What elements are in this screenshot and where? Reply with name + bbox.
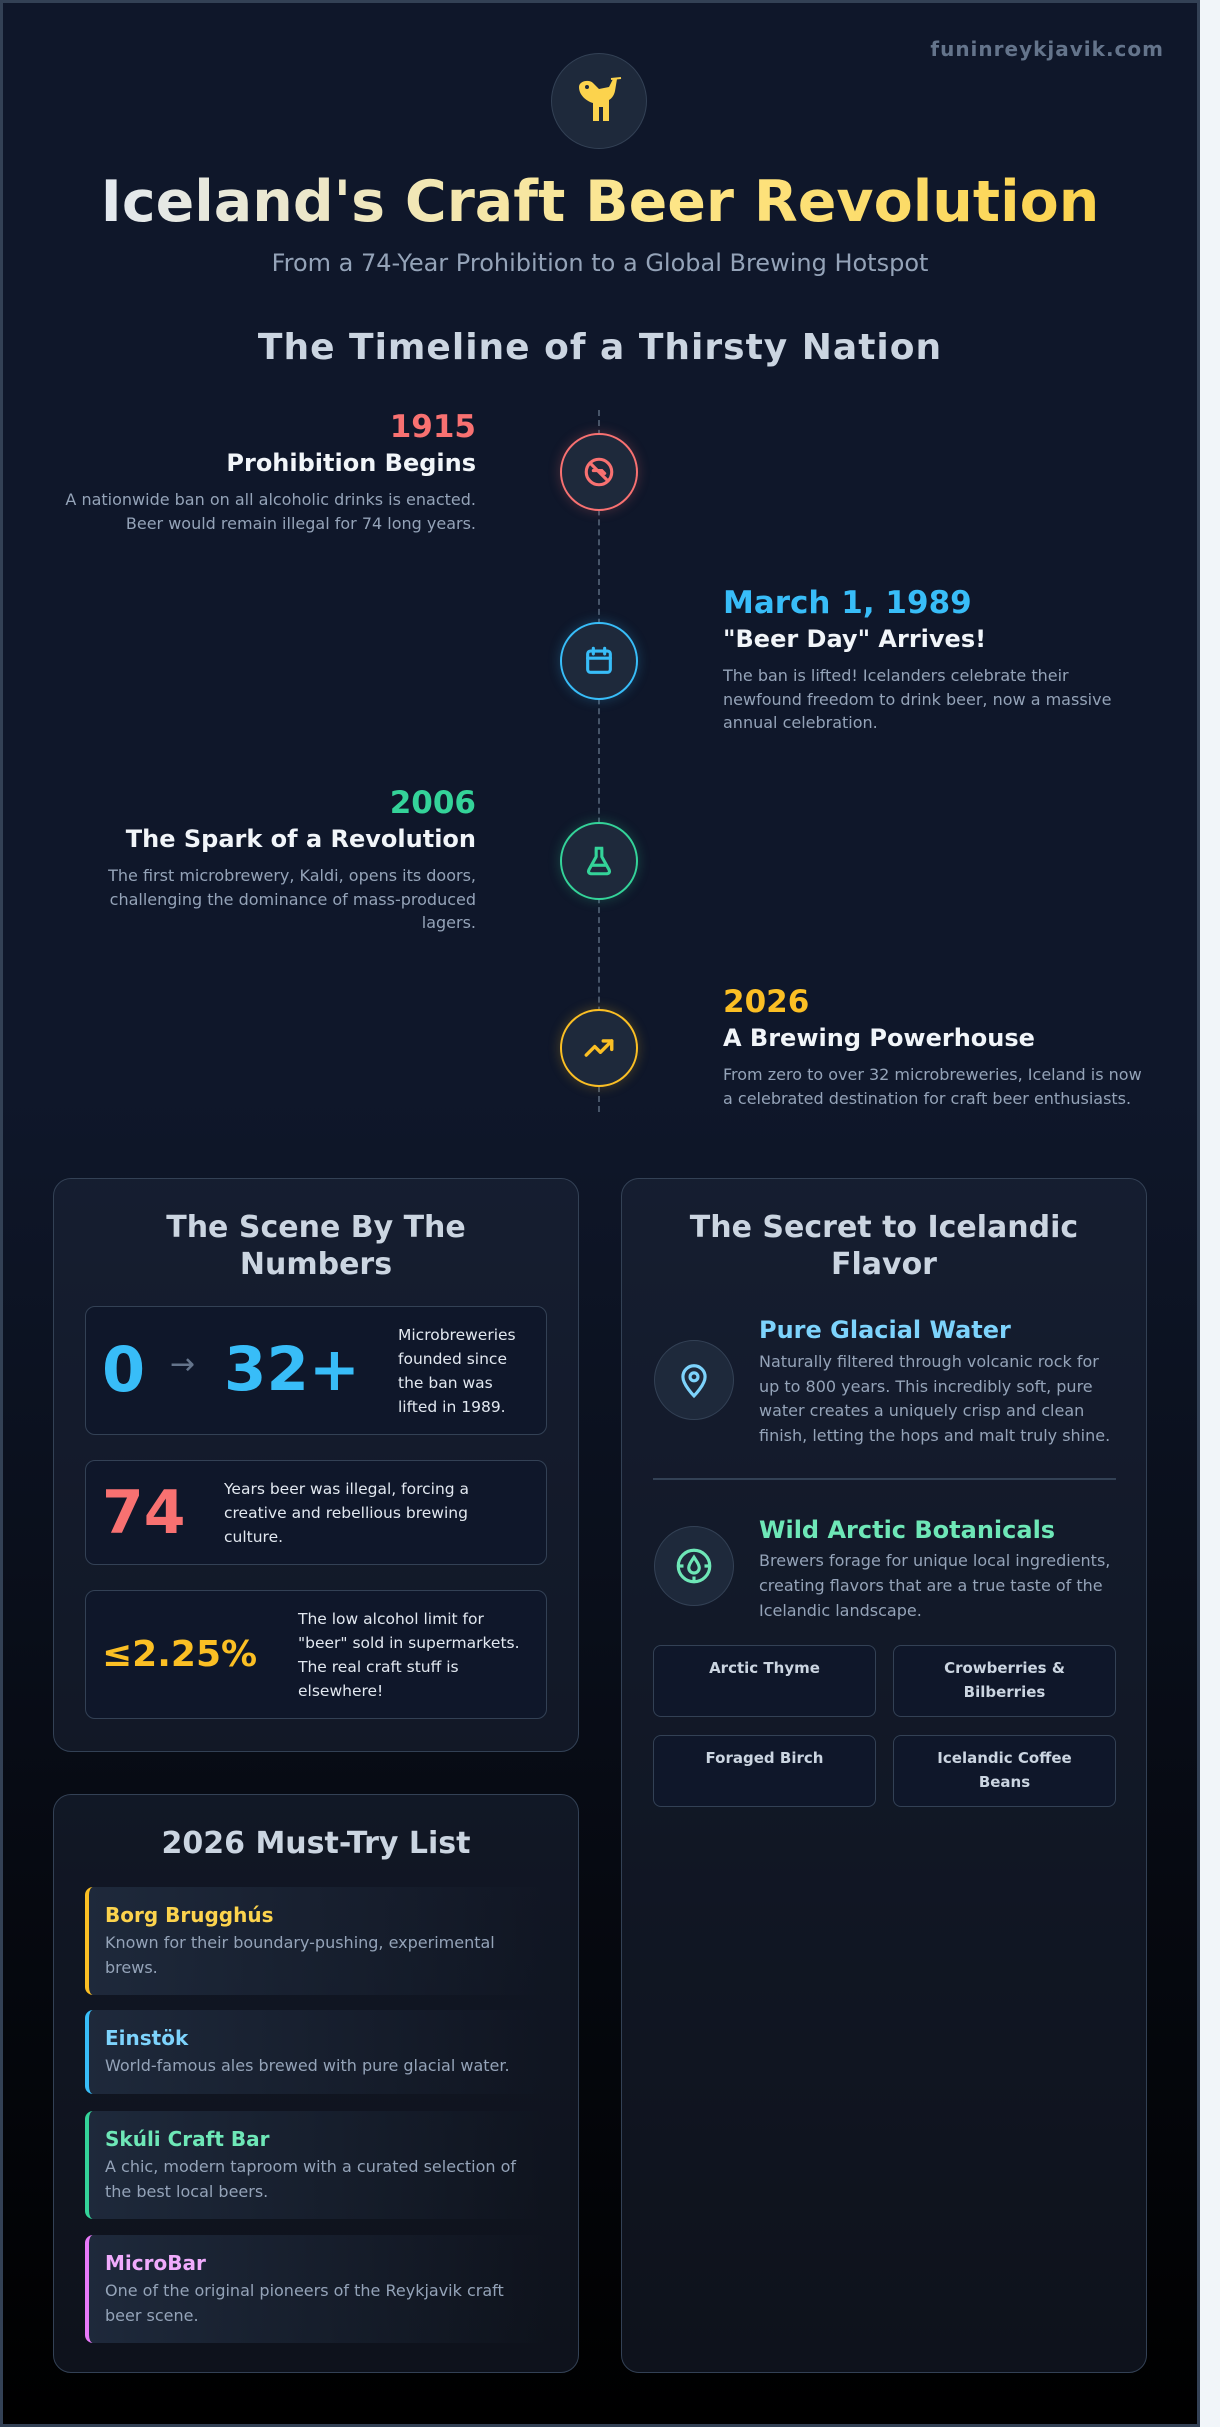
panel heading: The Scene By The — [166, 1210, 466, 1245]
item: skuli: Skúli Craft Bar — [105, 2127, 269, 2151]
feature: glacial water: Pure Glacial Water — [759, 1316, 1011, 1344]
stat: 2.25%: ≤2.25% — [102, 1634, 257, 1675]
timeline item: 2026: 2026 — [723, 984, 809, 1020]
tag: coffee beans — [893, 1735, 1116, 1807]
item: einstok — [85, 2010, 547, 2094]
panel: scene by the numbers — [53, 1178, 579, 1752]
timeline item: 1915: A nationwide ban on all alcoholic drinks is enacted. Beer would remain illegal for 74 long years. — [65, 490, 476, 532]
feature: arctic botanicals: Brewers forage for unique local ingredients, creating flavors that are a true taste of the Icelandic landscape. — [759, 1551, 1110, 1620]
title: Iceland's Craft Beer Revolution — [101, 169, 1099, 235]
site url: funinreykjavik.com — [930, 37, 1164, 61]
item: microbar: One of the original pioneers of the Reykjavik craft beer scene. — [105, 2281, 504, 2325]
tag: coffee beans: Icelandic Coffee — [937, 1749, 1072, 1767]
tag: crowberries — [893, 1645, 1116, 1717]
feature: arctic botanicals: Wild Arctic Botanicals — [759, 1516, 1055, 1544]
panel: must-try list — [53, 1794, 579, 2373]
timeline item: 1989: The ban is lifted! Icelanders celebrate their newfound freedom to drink beer, now a massive annual celebration. — [723, 666, 1111, 732]
item: skuli — [85, 2111, 547, 2219]
timeline item: 2026 — [723, 984, 1142, 1108]
panel heading — [166, 1210, 466, 1282]
icon: trend up — [560, 1009, 638, 1087]
tag: foraged birch — [653, 1735, 876, 1807]
tag: crowberries: Crowberries & — [944, 1659, 1065, 1677]
stat: 74 years: 74 — [102, 1478, 186, 1548]
tag: arctic thyme — [653, 1645, 876, 1717]
icon: beer mascot — [551, 53, 647, 149]
timeline item: 1915 — [65, 409, 476, 532]
item: microbar — [85, 2235, 547, 2343]
timeline item: 1989: March 1, 1989 — [723, 585, 972, 621]
stat: 0 to 32+: 32+ — [224, 1334, 360, 1405]
timeline item: 2006: The Spark of a Revolution — [126, 825, 476, 853]
panel: secret to icelandic flavor — [621, 1178, 1147, 2373]
stat: 0 to 32+ — [85, 1306, 547, 1435]
stat: 74 years — [85, 1460, 547, 1565]
feature: arctic botanicals — [654, 1516, 1110, 1620]
timeline item: 2026: A Brewing Powerhouse — [723, 1024, 1035, 1052]
divider — [653, 1478, 1116, 1480]
icon: flask — [560, 822, 638, 900]
timeline item: 1989: "Beer Day" Arrives! — [723, 625, 986, 653]
panel heading: Flavor — [831, 1247, 937, 1282]
panel heading — [690, 1210, 1078, 1282]
feature: glacial water — [654, 1316, 1110, 1444]
panel heading: 2026 Must-Try List — [162, 1826, 470, 1861]
icon: calendar — [560, 622, 638, 700]
stat: 74 years: Years beer was illegal, forcing a creative and rebellious brewing culture. — [224, 1480, 469, 1546]
timeline line — [598, 410, 600, 1112]
timeline item: 1989 — [722, 585, 1111, 732]
icon: no alcohol — [560, 433, 638, 511]
tag: coffee beans: Beans — [979, 1773, 1030, 1791]
timeline item: 2006 — [108, 785, 476, 932]
item: microbar: MicroBar — [105, 2251, 206, 2275]
stat: 0 to 32+: → — [170, 1347, 195, 1382]
tag: arctic thyme: Arctic Thyme — [709, 1659, 820, 1677]
icon: botanical — [654, 1526, 734, 1606]
heading: timeline: The Timeline of a Thirsty Nation — [258, 327, 942, 368]
stat: 2.25%: The low alcohol limit for "beer" sold in supermarkets. The real craft stuff is elsewhere! — [298, 1610, 520, 1700]
item: skuli: A chic, modern taproom with a curated selection of the best local beers. — [105, 2157, 516, 2201]
timeline item: 1915: Prohibition Begins — [226, 449, 476, 477]
stat: 0 to 32+: 0 — [102, 1333, 145, 1406]
timeline item: 2006: The first microbrewery, Kaldi, opens its doors, challenging the dominance of mass-produced lagers. — [108, 866, 476, 932]
feature: glacial water: Naturally filtered through volcanic rock for up to 800 years. This incredibly soft, pure water creates a uniquely crisp and clean finish, letting the hops and malt truly shine. — [759, 1352, 1110, 1444]
tag: crowberries: Bilberries — [964, 1683, 1045, 1701]
item: einstok: Einstök — [105, 2026, 188, 2050]
item: borg — [85, 1887, 547, 1995]
tag: foraged birch: Foraged Birch — [706, 1749, 823, 1767]
item: borg: Known for their boundary-pushing, experimental brews. — [105, 1933, 495, 1977]
subtitle: From a 74-Year Prohibition to a Global Brewing Hotspot — [272, 249, 928, 277]
panel heading: Numbers — [240, 1247, 392, 1282]
stat: 0 to 32+: Microbreweries founded since the ban was lifted in 1989. — [398, 1326, 516, 1416]
timeline item: 2006: 2006 — [390, 785, 476, 821]
stat: 2.25% — [85, 1590, 547, 1719]
item: borg: Borg Brugghús — [105, 1903, 274, 1927]
panel heading: The Secret to Icelandic — [690, 1210, 1078, 1245]
timeline item: 2026: From zero to over 32 microbreweries, Iceland is now a celebrated destination for craft beer enthusiasts. — [723, 1065, 1142, 1108]
timeline item: 1915: 1915 — [390, 409, 476, 445]
item: einstok: World-famous ales brewed with pure glacial water. — [105, 2056, 510, 2075]
icon: location pin — [654, 1340, 734, 1420]
